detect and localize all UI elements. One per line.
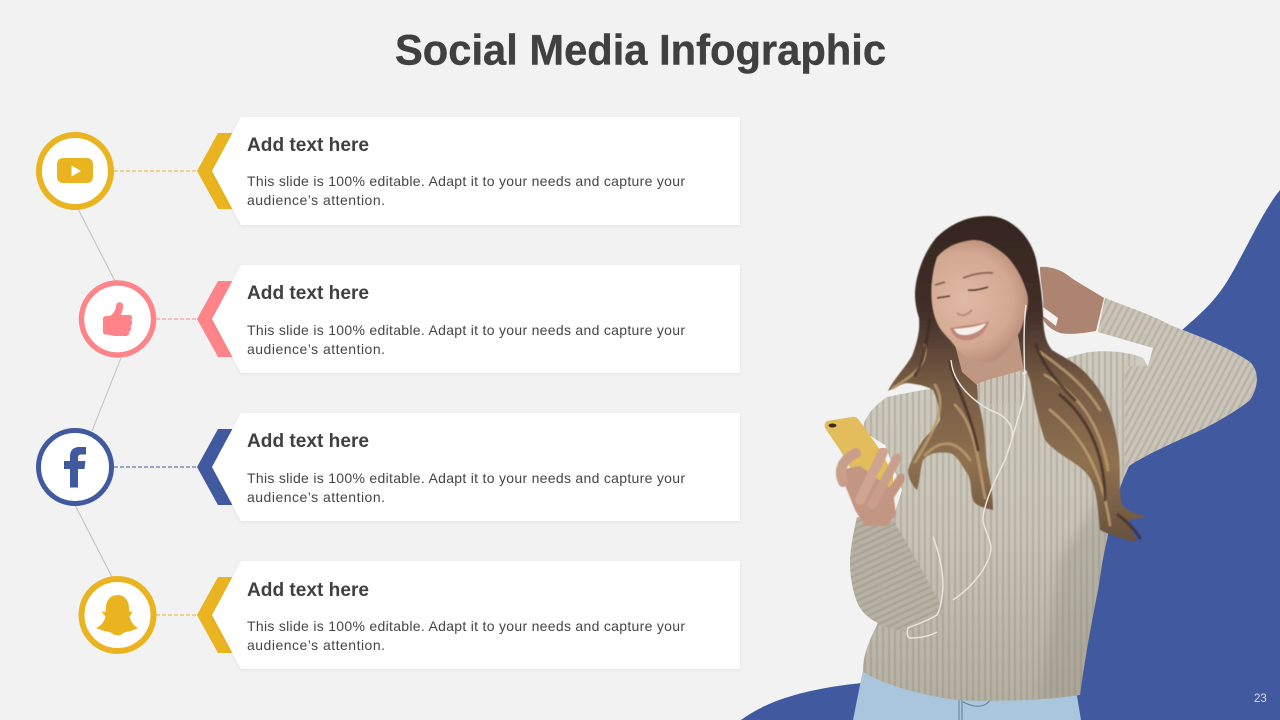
body text 1: audience’s attention.	[247, 192, 385, 208]
gap between fingers	[1043, 307, 1058, 326]
row 1: YouTube	[39, 117, 740, 225]
chevron 2	[197, 281, 234, 357]
dashed connector 4	[156, 614, 197, 616]
nose shadow	[957, 310, 972, 315]
phone camera	[828, 424, 836, 428]
heading 3: Add text here	[247, 431, 369, 452]
eyebrows	[935, 273, 993, 285]
dashed connector 2	[156, 318, 197, 320]
chevron 3	[197, 429, 234, 505]
blue wave background shape	[741, 190, 1280, 720]
title: Social Media Infographic	[395, 26, 886, 74]
sweater collar	[977, 370, 1028, 404]
jeans	[853, 670, 1081, 720]
hand holding phone	[839, 452, 901, 526]
dashed connector 3	[114, 466, 197, 468]
chevron 1	[197, 133, 234, 209]
body text 2: This slide is 100% editable. Adapt it to your needs and capture your	[247, 322, 685, 338]
row 4: Snapchat	[82, 561, 740, 669]
body text 1: This slide is 100% editable. Adapt it to your needs and capture your	[247, 173, 685, 189]
page number: 23	[1254, 693, 1267, 705]
hand touching hair	[1040, 267, 1104, 334]
icon: Snapchat ghost	[82, 579, 154, 651]
body text 4: This slide is 100% editable. Adapt it to your needs and capture your	[247, 618, 685, 634]
face	[931, 240, 1028, 362]
hair strands	[893, 320, 1140, 538]
heading 1: Add text here	[247, 135, 369, 156]
text card 4	[212, 561, 740, 669]
heading 4: Add text here	[247, 580, 369, 601]
neck	[955, 335, 1024, 386]
body text 3: audience’s attention.	[247, 489, 385, 505]
body ribs	[864, 351, 1136, 701]
icon: YouTube	[39, 135, 111, 207]
closed eyes	[937, 287, 988, 298]
row 3: Facebook	[38, 413, 740, 521]
smile	[950, 321, 989, 340]
row 2: Thumbs up	[82, 265, 740, 373]
sweater	[840, 290, 1270, 710]
long hair	[888, 216, 1146, 542]
icon: thumbs up	[82, 283, 154, 355]
body text 3: This slide is 100% editable. Adapt it to your needs and capture your	[247, 470, 685, 486]
sweater shadow	[1042, 501, 1108, 698]
text card 3	[212, 413, 740, 521]
text card 1	[212, 117, 740, 225]
photo: woman with phone	[825, 216, 1270, 720]
facial features	[935, 273, 993, 315]
left sleeve	[850, 517, 944, 631]
right sleeve ribs	[1098, 298, 1257, 475]
body text 4: audience’s attention.	[247, 637, 385, 653]
icon: Facebook	[38, 430, 112, 504]
dashed connector 1	[114, 170, 197, 172]
connector lines between icons	[75, 209, 121, 577]
chevron 4	[197, 577, 234, 653]
earphone cables	[907, 305, 1026, 638]
phone	[825, 417, 893, 490]
body text 2: audience’s attention.	[247, 341, 385, 357]
heading 2: Add text here	[247, 283, 369, 304]
text card 2	[212, 265, 740, 373]
